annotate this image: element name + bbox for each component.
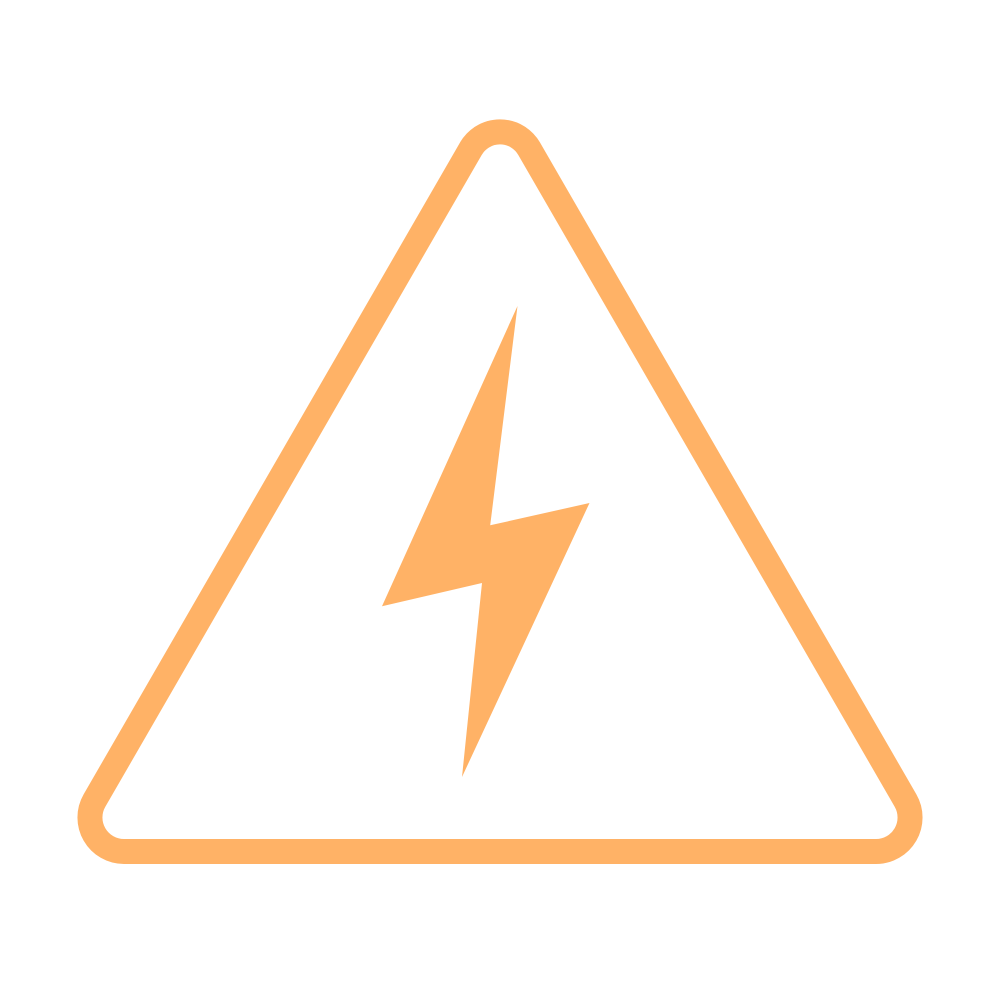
icon: lightning bolt	[382, 306, 590, 777]
icon: rounded warning triangle outline	[90, 132, 910, 852]
